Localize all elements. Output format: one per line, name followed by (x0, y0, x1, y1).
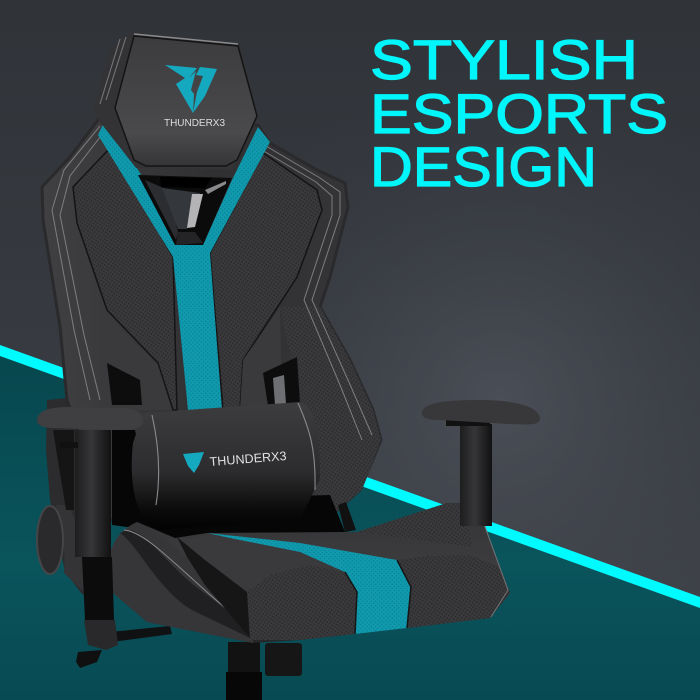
seat (110, 503, 510, 643)
bolster carbon band (120, 530, 250, 638)
gas lift and knob (226, 642, 302, 700)
seat teal stripe (207, 533, 411, 634)
teal Y stripe (98, 120, 270, 410)
icon: headrest logo (165, 65, 217, 113)
lower shell shadow (280, 307, 381, 525)
lower grey panel left (105, 313, 172, 410)
heading: STYLISH (370, 28, 638, 91)
seat right bolster (357, 503, 473, 547)
teal floor (0, 356, 700, 700)
back panel right (210, 153, 322, 410)
lower grey panel right (240, 307, 282, 410)
right back slot (263, 357, 300, 406)
left back slot (107, 363, 142, 405)
dark area beside and below pillow (112, 430, 345, 540)
triangular cutout (138, 175, 232, 245)
seat right carbon cushion (397, 555, 510, 628)
headrest (93, 32, 258, 170)
pillow brand text: THUNDERX3 (209, 449, 287, 469)
seat upper band (187, 535, 345, 592)
seat crease shadow (177, 537, 250, 638)
seat base shadow bar (110, 626, 172, 642)
bolster stitching (52, 126, 372, 440)
backrest shell (42, 118, 381, 525)
recline disc (37, 505, 85, 593)
heading: ESPORTS (370, 82, 668, 145)
heading: DESIGN (370, 135, 597, 198)
gaming chair (37, 32, 540, 700)
seat centre cushion (247, 565, 357, 640)
lumbar pillow (132, 402, 320, 530)
icon: pillow logo (183, 452, 204, 473)
left armrest (37, 407, 143, 668)
back panel left (73, 148, 177, 410)
back support bracket (338, 502, 356, 532)
headrest brand text: THUNDERX3 (164, 118, 225, 129)
seat left bolster (110, 522, 253, 643)
left recline side shell (46, 395, 100, 600)
right armrest (422, 400, 540, 526)
heading (370, 28, 668, 198)
cyan diagonal line (0, 345, 700, 608)
